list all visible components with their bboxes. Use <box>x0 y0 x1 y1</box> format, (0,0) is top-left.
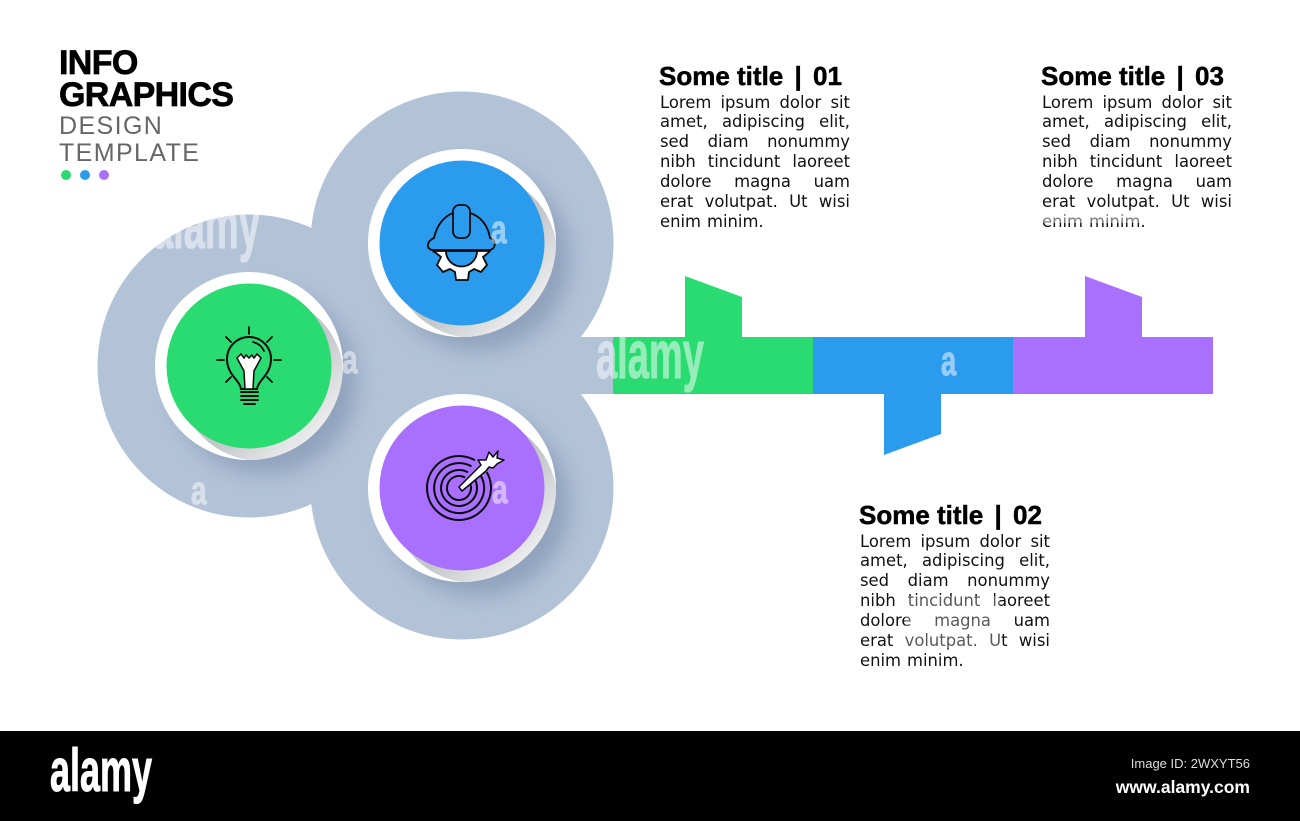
body 03: nonummy <box>1149 132 1232 151</box>
body 01: ipsum <box>720 92 770 112</box>
body 01: elit, <box>819 112 850 131</box>
body 01: dolor <box>780 92 821 112</box>
body 02: magna <box>934 611 991 630</box>
body 02: nibh <box>860 591 896 610</box>
body 02: dolore <box>860 611 911 630</box>
heading: INFO GRAPHICS <box>59 44 233 114</box>
body 02: dolor <box>980 532 1021 550</box>
watermark on connector: alamy <box>596 317 704 393</box>
body 01: magna <box>734 172 791 191</box>
subheading: DESIGN TEMPLATE: DESIGN <box>59 112 163 140</box>
body 03: diam <box>1090 132 1131 151</box>
body 03: erat <box>1042 192 1075 211</box>
watermark overlays: a <box>191 469 207 513</box>
watermark overlays: a <box>941 337 956 384</box>
body 01: amet, <box>660 112 708 131</box>
body 03: minim. <box>1089 212 1146 231</box>
body 01: laoreet <box>792 152 850 171</box>
subheading: DESIGN TEMPLATE <box>59 112 200 166</box>
body 01: diam <box>708 132 749 151</box>
body 03: wisi <box>1201 192 1232 211</box>
footer url: www.alamy.com <box>1116 777 1250 797</box>
body 01: uam <box>814 172 850 191</box>
body 01: Ut <box>789 192 808 211</box>
body 02: sit <box>1030 532 1050 550</box>
purple circle with target icon <box>368 394 570 596</box>
body 02: amet, <box>860 551 908 570</box>
body 01: volutpat. <box>705 192 778 211</box>
title 01: Some title | 01 <box>659 61 842 91</box>
faded text patches <box>1042 214 1147 223</box>
blue circle with helmet icon <box>368 149 570 351</box>
body 03: volutpat. <box>1087 192 1160 211</box>
body 02: volutpat. <box>905 631 978 650</box>
subheading: DESIGN TEMPLATE: TEMPLATE <box>59 138 200 166</box>
body 01: dolore <box>660 172 711 191</box>
body 02: adipiscing <box>922 551 1005 570</box>
body 01: sit <box>830 92 850 112</box>
body 03: ipsum <box>1102 92 1152 112</box>
body 03: nibh <box>1042 152 1078 171</box>
body 01: Lorem <box>660 92 711 112</box>
colour dots <box>61 170 109 180</box>
green circle with bulb icon <box>155 272 357 474</box>
footer image id: Image ID: 2WXYT56 <box>1131 756 1250 771</box>
body 02: elit, <box>1019 551 1050 570</box>
icon: helmet and gear <box>428 205 495 280</box>
body 03: dolor <box>1162 92 1203 112</box>
watermark overlays: a <box>342 338 358 382</box>
step 3 purple arrow segment <box>1013 276 1213 394</box>
body 02: nonummy <box>967 571 1050 590</box>
body 03: adipiscing <box>1104 112 1187 131</box>
body 02: diam <box>908 571 949 590</box>
title 02: Some title | 02 <box>859 500 1042 530</box>
small watermark letters: a <box>491 208 507 252</box>
body 01: erat <box>660 192 693 211</box>
text block 03 <box>1041 61 1232 231</box>
body 01: nonummy <box>767 132 850 151</box>
body 01 <box>660 92 850 231</box>
grey connector shape <box>98 92 614 640</box>
title 03: Some title | 03 <box>1041 61 1224 91</box>
title block <box>59 44 233 180</box>
body 03: elit, <box>1201 112 1232 131</box>
watermark overlays: a <box>492 468 508 512</box>
step 2 blue arrow segment <box>813 337 1013 455</box>
icon: target and arrow <box>427 451 504 520</box>
body 02 <box>860 532 1050 670</box>
body 02: wisi <box>1019 631 1050 650</box>
heading: INFO GRAPHICS: INFO <box>59 44 138 82</box>
text block 02 <box>859 500 1050 670</box>
body 03: laoreet <box>1174 152 1232 171</box>
footer logo: alamy <box>50 737 152 804</box>
body 01: minim. <box>707 212 764 231</box>
body 03: enim <box>1042 212 1083 231</box>
body 01: sed <box>660 132 689 151</box>
body 03: uam <box>1196 172 1232 191</box>
body 03: sed <box>1042 132 1071 151</box>
body 03: tincidunt <box>1090 152 1162 171</box>
body 02: enim <box>860 651 901 670</box>
body 03: Lorem <box>1042 92 1093 112</box>
body 03: sit <box>1212 92 1232 112</box>
body 01: nibh <box>660 152 696 171</box>
body 02: Lorem <box>860 532 911 550</box>
body 03: amet, <box>1042 112 1090 131</box>
body 03: Ut <box>1171 192 1190 211</box>
text block 01 <box>659 61 850 231</box>
step 1 green arrow segment <box>613 276 813 394</box>
icon: light bulb <box>217 327 281 404</box>
body 02: uam <box>1014 611 1050 630</box>
heading: INFO GRAPHICS: GRAPHICS <box>59 76 233 114</box>
body 03 <box>1042 92 1232 231</box>
watermark on left circle: alamy <box>152 187 260 263</box>
body 02: tincidunt <box>908 591 980 610</box>
body 02: ipsum <box>920 532 970 550</box>
body 01: wisi <box>819 192 850 211</box>
body 02: erat <box>860 631 893 650</box>
body 02: sed <box>860 571 889 590</box>
body 01: adipiscing <box>722 112 805 131</box>
body 02: Ut <box>989 631 1008 650</box>
body 03: dolore <box>1042 172 1093 191</box>
body 01: enim <box>660 212 701 231</box>
main diagram <box>98 92 1213 640</box>
body 02: laoreet <box>992 591 1050 610</box>
footer bar <box>0 731 1300 821</box>
body 03: magna <box>1116 172 1173 191</box>
body 01: tincidunt <box>708 152 780 171</box>
body 02: minim. <box>907 651 964 670</box>
